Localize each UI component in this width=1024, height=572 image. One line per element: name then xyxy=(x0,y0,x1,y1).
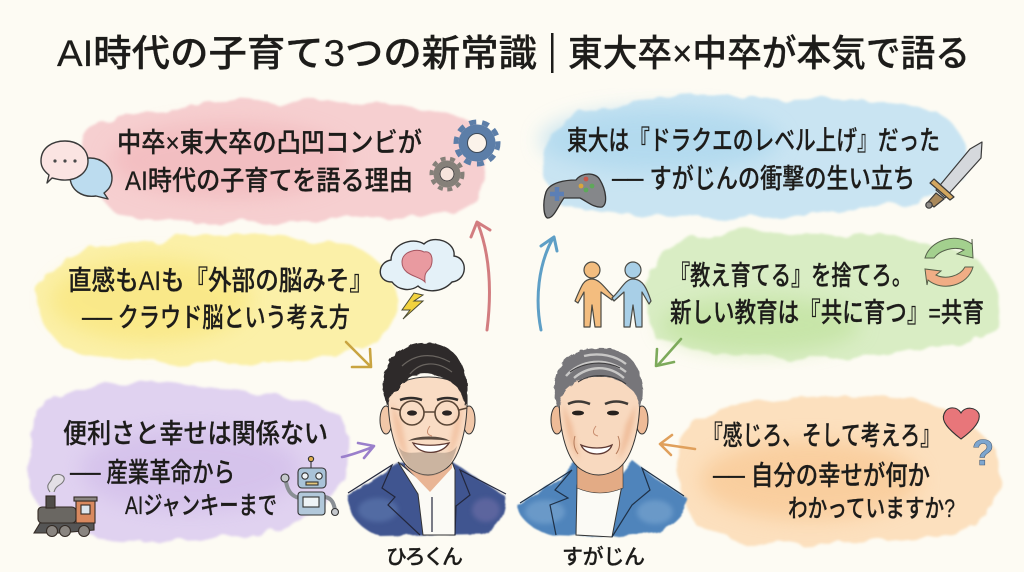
panel: yellow topic xyxy=(38,234,464,364)
panel: blue topic xyxy=(540,95,982,219)
neck xyxy=(405,448,452,492)
text: green heading xyxy=(670,261,984,328)
text: pink heading: 中卒×東大卒の凸凹コンビが xyxy=(117,128,422,158)
mouth xyxy=(413,443,449,452)
panel: pink topic xyxy=(41,100,498,222)
panel: green topic xyxy=(575,230,1001,361)
arrow: up to pink xyxy=(471,222,490,330)
text: pink heading xyxy=(117,128,422,196)
ears xyxy=(551,406,563,434)
text: purple heading: AIジャンキーまで xyxy=(125,492,277,520)
glasses xyxy=(391,401,467,425)
text: orange heading: わかっていますか? xyxy=(788,495,955,523)
arrow: green to sugajin xyxy=(656,339,681,366)
arrow: up to blue xyxy=(538,237,557,330)
text: yellow heading xyxy=(68,266,373,333)
smile lines xyxy=(574,436,620,454)
title: 東大卒×中卒が本気で語る xyxy=(568,33,970,74)
icon: heart and question mark xyxy=(943,408,994,473)
text: yellow heading: ── クラウド脳という考え方 xyxy=(81,303,350,333)
text: orange heading xyxy=(703,421,955,523)
text: orange heading: ── 自分の幸せが何か xyxy=(712,461,930,491)
arrow: yellow to hirokun xyxy=(346,342,371,367)
portrait: sugajin xyxy=(518,348,687,537)
t-shirt xyxy=(576,485,622,537)
text: green heading: 『教え育てる』を捨てろ。 xyxy=(670,261,912,291)
eyes and brows xyxy=(400,398,458,400)
icon: robot xyxy=(281,456,338,516)
arrow: orange to sugajin xyxy=(660,435,695,455)
hair xyxy=(554,348,643,408)
icon: game controller xyxy=(544,174,606,218)
face xyxy=(559,376,640,475)
face shading xyxy=(392,402,463,458)
icon: two people holding hands xyxy=(575,262,651,327)
text: blue heading xyxy=(567,126,940,194)
text: yellow heading: 直感もAIも『外部の脳みそ』 xyxy=(68,266,373,296)
jacket xyxy=(518,460,687,537)
neck xyxy=(577,448,623,493)
shirt xyxy=(398,462,455,535)
beard xyxy=(398,446,457,476)
title: AI時代の子育て3つの新常識 xyxy=(57,33,537,74)
panel: orange topic xyxy=(676,396,998,544)
title xyxy=(57,33,970,74)
text: purple heading xyxy=(63,419,328,520)
portrait: hirokun xyxy=(348,343,506,536)
hair xyxy=(383,343,467,406)
hair strands xyxy=(402,356,452,374)
smile xyxy=(581,445,612,454)
brows and eyes xyxy=(568,402,628,404)
icon: heart and question mark: ? xyxy=(972,432,994,473)
text: blue heading: ── すがじんの衝撃の生い立ち xyxy=(611,164,915,194)
panel: purple topic xyxy=(27,381,350,541)
text: orange heading: 『感じろ、そして考えろ』 xyxy=(703,421,940,451)
arrow: purple to hirokun xyxy=(342,443,374,458)
icon: speech bubbles xyxy=(41,141,112,199)
text: purple heading: ── 産業革命から xyxy=(69,458,235,488)
icon: sword xyxy=(926,142,982,208)
icon: brain cloud xyxy=(380,240,464,319)
name: sugajin: すがじん xyxy=(562,546,645,569)
hair highlights xyxy=(566,354,626,378)
icon: cycle arrows xyxy=(925,238,973,286)
icon: steam train xyxy=(34,474,97,536)
name: hirokun: ひろくん xyxy=(386,546,463,569)
text: purple heading: 便利さと幸せは関係ない xyxy=(63,419,328,449)
ears xyxy=(380,406,392,434)
face xyxy=(388,377,467,475)
text: pink heading: AI時代の子育てを語る理由 xyxy=(125,166,413,196)
face shading xyxy=(563,404,636,460)
icon: gears xyxy=(432,122,498,190)
jacket xyxy=(348,458,506,536)
